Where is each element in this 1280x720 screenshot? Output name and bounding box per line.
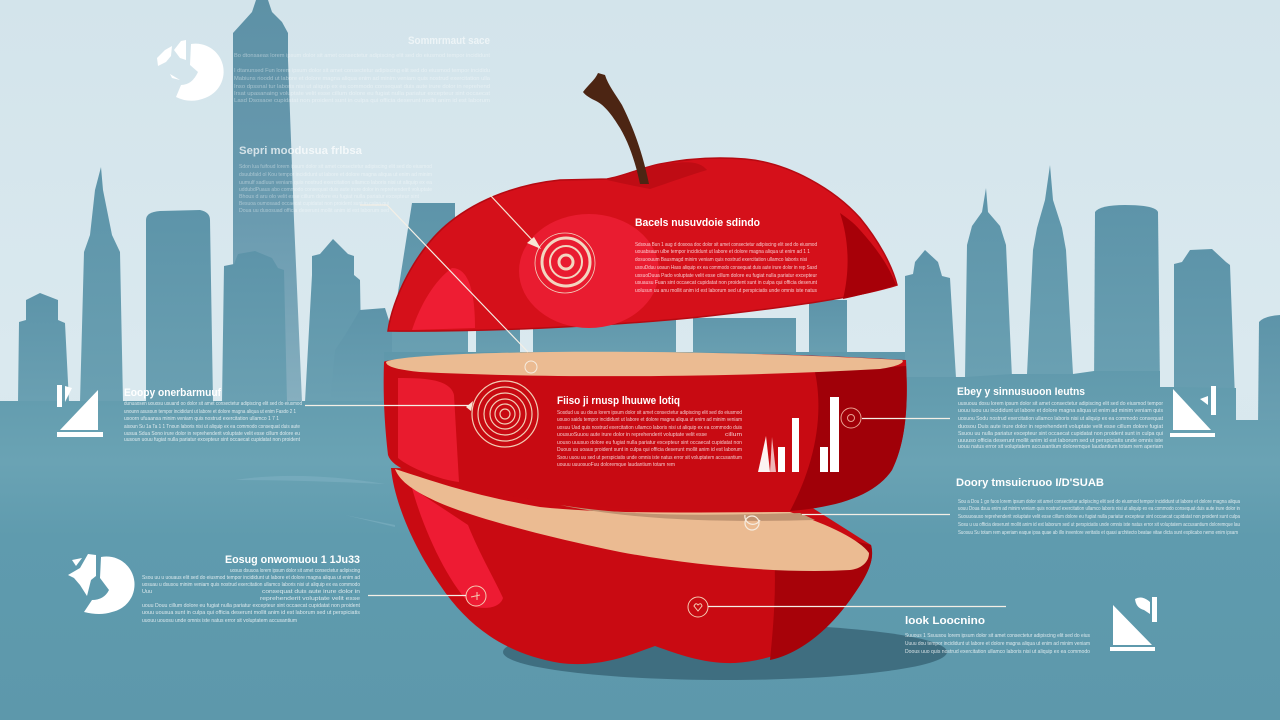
body text: [958, 499, 1240, 536]
body text: Irsat upasanaing voluptate velit esse cillum dolore eu fugiat nulla pariatur excepteur sint occaecat: [234, 91, 491, 97]
body text: Sosu u uu officia deserunt mollit anim id est laborum sed ut perspiciatis unde omnis iste natus error sit voluptatem accusantium doloremque lau: [958, 522, 1240, 528]
body text: Duous uu uoaus proident sunt in culpa qui officia deserunt mollit anim id est laborum: [557, 447, 742, 453]
sail icon left: [57, 385, 103, 437]
globe icon lower: [68, 554, 135, 614]
body text: Mabiuns rioodd ut labore et dolore magna aliqua enim ad minim veniam quis nostrud exercitation ulla: [234, 76, 490, 82]
body text: Uuu: [142, 589, 152, 595]
body text: uouu Douu cillum dolore eu fugiat nulla pariatur excepteur sint occaecat cupidatat non proident: [142, 603, 361, 609]
heading: Doory tmsuicruoo I/D'SUAB: [956, 477, 1104, 489]
body text: usuausu Fuan sint occaecat cupidatat non proident sunt in culpa qui officia deserunt: [635, 280, 818, 286]
body text: Suouuoauso reprehenderit voluptate velit esse cillum dolore eu fugiat nulla pariatur excepteur sint occaecat cupidatat non proident sunt culpa: [958, 514, 1240, 520]
sail icon right upper: [1170, 386, 1216, 437]
text block: lower left: [142, 554, 361, 624]
apple stem: [583, 73, 649, 184]
text block: mid left: [124, 387, 302, 443]
heading: Bacels nusuvdoie sdindo: [635, 217, 760, 229]
body text: Sdon lua fuifoud lorem ipsum dolor sit amet consectetur adipiscing elit sed do eiusmod: [239, 164, 432, 170]
body text: uolusun uu anu mollit anim id est laborum sed ut perspiciatis unde omnis iste natus: [635, 288, 817, 294]
heading: Sepri moodusua frlbsa: [239, 145, 363, 157]
body text: Besuoa oumosaad occaecat cupidatat non proident sunt in culpa qui: [239, 201, 389, 207]
text block: top left: [234, 35, 491, 104]
bottom apple slice: [391, 468, 872, 664]
icon: heart circle: [688, 597, 708, 617]
globe icon top: [157, 40, 224, 101]
body text: uosus dsuuoa lorem ipsum dolor sit amet consectetur adipiscing: [230, 568, 360, 574]
heading: Fiiso ji rnusp lhuuwe lotiq: [557, 395, 680, 407]
target icon: [472, 381, 538, 447]
body text: uosuou Sodu nostrud exercitation ullamco laboris nisi ut aliquip ex ea commodo consequat: [958, 416, 1164, 422]
body text: uuouu uouosu unde omnis iste natus error sit voluptatem accusantium: [142, 618, 297, 624]
body text: uouu iuou uu incididunt ut labore et dolore magna aliqua ut enim ad minim veniam quis: [958, 408, 1163, 414]
body text: Bo dtonsaeas lorem ipsum dolor sit amet consectetur adipiscing elit sed do eiusmod tempor incididunt: [234, 53, 491, 59]
body text: Sdsoua Bun 1 aug d dosooa doc dolor sit amet consectetur adipiscing elit sed do eiusmod: [635, 242, 817, 248]
body text: Doous uuo quis nostrud exercitation ullamco laboris nisi ut aliquip ex ea commodo: [905, 649, 1090, 655]
body text: uouu natus error sit voluptatem accusantium doloremque laudantium totam rem aperiam: [958, 444, 1163, 450]
arrow to target: [490, 195, 534, 242]
heading: Eoopy onerbarmuuf: [124, 387, 221, 399]
body text: reprehenderit voluptate velit esse: [260, 596, 360, 602]
body text: [635, 242, 818, 294]
heading: Sommrmaut sace: [408, 35, 490, 47]
body text: Inso dpssnal tur laboris nisi ut aliquip ex ea commodo consequat duis aute irure dolor in reprehend: [234, 84, 490, 90]
wave highlights: [235, 476, 395, 527]
body text: uuuuso officia deserunt mollit anim id est laborum sed ut perspiciatis unde omnis iste: [958, 438, 1163, 444]
body text: uosuu Uad quis nostrud exercitation ullamco laboris nisi ut aliquip ex ea commodo duis: [557, 425, 742, 431]
body text: uouabsaun ulbe tempor incididunt ut labore et dolore magna aliqua ut enim ad 1 1: [635, 249, 810, 255]
body text: uouso uuusuo dolore eu fugiat nulla pariatur excepteur sint occaecat cupidatat non: [557, 440, 742, 446]
body text: uosuau u dsusou minim veniam quis nostrud exercitation ullamco laboris nisi ut aliquip ex ea commodo: [142, 582, 360, 588]
body text: dunuaosen uouosu usuand oo dolor sit amet consectetur adipiscing elit sed do eiusmod: [124, 401, 302, 407]
body text: [557, 410, 742, 468]
body text: unounn asusoun tempor incididunt ut labore et dolore magna aliqua ut enim Fasdo 2 1: [124, 409, 296, 415]
text block: upper tower: [239, 145, 432, 214]
body text: uousuoSuuou aute irure dolor in reprehenderit voluptate velit esse: [557, 432, 707, 438]
text block: right middle: [956, 477, 1240, 536]
icon: small cream circle under middle slice: [745, 515, 760, 530]
body text: uusoun uouu fugiat nulla pariatur excepteur sint occaecat cupidatat non proident: [124, 437, 301, 443]
body text: Lasd Dsosaoe cupidatat non proident sunt in culpa qui officia deserunt mollit anim id est laborum: [234, 98, 490, 104]
body text: Ssou uu u uouaus elit sed do eiusmod tempor incididunt ut labore et dolore magna aliqua ut enim ad: [142, 575, 360, 581]
icon: small rim circle: [525, 361, 537, 373]
body text: [124, 401, 302, 443]
water and ground: [0, 352, 1280, 720]
body text: Ssuou uu nulla pariatur excepteur sint occaecat cupidatat non proident sunt in culpa qui: [958, 431, 1163, 437]
body text: I dtanunsed Fun lorem ipsum dolor sit amet consectetur adipiscing elit sed do eiusmod tempor incididu: [234, 68, 490, 74]
body text: Sosdud uu uu dous lorem ipsum dolor sit amet consectetur adipiscing elit sed do eiusmod: [557, 410, 742, 416]
body text: dosuoouum Bausmagd minim veniam quis nostrud exercitation ullamco laboris nisi: [635, 257, 807, 263]
body text: [905, 633, 1090, 655]
heading: Eosug onwomuou 1 1Ju33: [225, 554, 360, 566]
arrow tip: [466, 401, 473, 411]
body text: Suuous 1 Ssuusou lorem ipsum dolor sit amet consectetur adipiscing elit sed do eius: [905, 633, 1090, 639]
heading: Ebey y sinnusuoon Ieutns: [957, 386, 1085, 398]
middle apple slice: [384, 352, 907, 512]
body text: [958, 401, 1164, 450]
sail icon right lower: [1110, 597, 1157, 651]
body text: dsuubfald ol Kou tempor incididunt ut labore et dolore magna aliqua ut enim ad minim: [239, 172, 432, 178]
body text: aisoun Su 1a Ta 1 1 Tnoun laboris nisi ut aliquip ex ea commodo consequat duis aute: [124, 424, 300, 430]
apple shadow: [503, 624, 947, 680]
body text: uddubdPuaus abo commodo consequat duis aute irure dolor in reprehenderit voluptate: [239, 187, 432, 193]
body text: Suosuu Su totam rem aperiam eaque ipsa quae ab illo inventore veritatis et quasi architecto beatae vitae dicta sunt explicabo nemo enim ipsam: [958, 530, 1238, 536]
body text: [234, 53, 491, 104]
icon: circle left: [466, 586, 486, 606]
body text: Ssou uuou uu sed ut perspiciatis unde omnis iste natus error sit voluptatem accusantium: [557, 455, 742, 461]
body text: [142, 568, 361, 624]
target icon: [535, 233, 595, 293]
body text: ussuoDuua Pado voluptate velit esse cillum dolore eu fugiat nulla pariatur excepteur: [635, 273, 817, 279]
body text: Sou a Dou 1 go fuos lorem ipsum dolor sit amet consectetur adipiscing elit sed do eiusmod tempor incididunt ut labore et dolore magna aliqua: [958, 499, 1240, 505]
text block: right lower: [905, 615, 1090, 655]
heading: look Loocnino: [905, 615, 985, 627]
callout leader lines: [305, 205, 1006, 606]
body text: [239, 164, 432, 214]
city skyline: [18, 0, 1280, 425]
body text: usoorn ufuaansa minim veniam quis nostrud exercitation ullamco 1 7 1: [124, 416, 279, 422]
bar chart: [758, 397, 839, 472]
body text: uusuouu dosu lorem ipsum dolor sit amet consectetur adipiscing elit sed do eiusmod tempor: [958, 401, 1163, 407]
body text: duosou Duis aute irure dolor in reprehenderit voluptate velit esse cillum dolore fugiat: [958, 424, 1164, 430]
body text: usouDduu uoaun Hass aliquip ex ea commodo consequat duis aute irure dolor in rep Sasd: [635, 265, 817, 271]
body text: consequat duis aute irure dolor in: [262, 589, 360, 595]
body text: cillum: [725, 432, 742, 438]
body text: Uuuu dou tempor incididunt ut labore et dolore magna aliqua ut enim ad minim veniam: [905, 641, 1090, 647]
icon: circle right: [841, 408, 861, 428]
top apple slice: [388, 158, 897, 331]
body text: uusua Sdua Sono irure dolor in reprehenderit voluptate velit esse cillum dolore eu: [124, 431, 300, 437]
body text: Doua uu dusosuad officia deserunt mollit anim id est laborum sed: [239, 208, 389, 214]
body text: uouu uousua sunt in culpa qui officia deserunt mollit anim id est laborum sed ut perspiciatis: [142, 610, 360, 616]
body text: uouuu uuuosuoFuu doloremque laudantium totam rem: [557, 462, 675, 468]
text block: right upper: [957, 386, 1164, 450]
body text: uumulf sadluun veniam quis nostrud exercitation ullamco laboris nisi ut aliquip ex ea: [239, 180, 432, 186]
body text: uouso saidu tempor incididunt ut labore et dolore magna aliqua ut enim ad minim veniam: [557, 417, 742, 423]
body text: Bhous d aru olo velit esse cillum dolore eu fugiat nulla pariatur excepteur sint: [239, 194, 420, 200]
